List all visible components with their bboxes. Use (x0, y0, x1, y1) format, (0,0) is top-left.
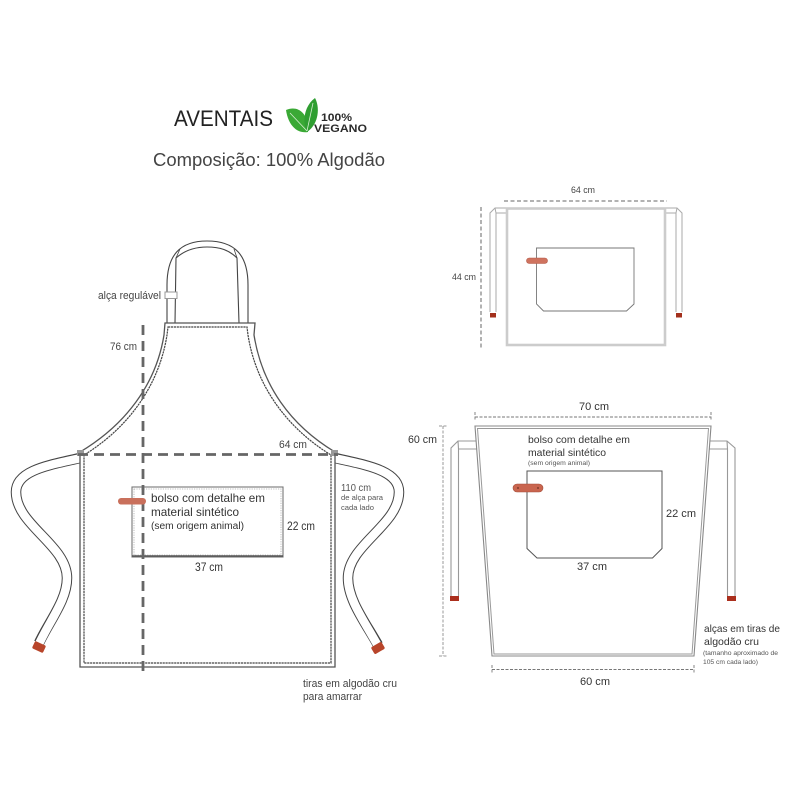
label: 70 cm: 70 cm (579, 401, 609, 413)
apron body (507, 208, 665, 345)
icon: vegan badge: 100% (321, 112, 352, 124)
strap joints (77, 450, 338, 456)
panel: tapered waist apron (439, 412, 736, 674)
left strap tip (450, 596, 459, 601)
dashed measure: bottom width (492, 665, 694, 674)
strap length note: de alça para (341, 493, 384, 502)
strap note: algodão cru (704, 636, 759, 648)
label: 60 cm height: 60 cm (408, 434, 437, 446)
tie strap note (303, 678, 397, 703)
label: adjustable strap: alça regulável (98, 290, 161, 302)
label: pocket width: 37 cm (195, 560, 223, 574)
tie strap note: tiras em algodão cru (303, 678, 397, 690)
neck strap (167, 241, 248, 323)
label: 64 cm: 64 cm (279, 439, 307, 451)
pocket (536, 248, 634, 311)
icon: vegan badge: VEGANO (314, 123, 367, 135)
pocket note (528, 434, 630, 467)
strap note: alças em tiras de (704, 623, 780, 635)
left tie strap (16, 458, 81, 644)
inner hem (478, 428, 708, 654)
dashed measure: top width (475, 412, 711, 421)
pocket note: bolso com detalhe em (528, 434, 630, 446)
right strap tip (371, 642, 385, 654)
right strap tip (676, 313, 682, 318)
right strap (666, 208, 682, 312)
right strap (709, 441, 735, 596)
adjustable buckle (165, 292, 177, 298)
strap length note (341, 483, 384, 512)
label: 64 cm top: 64 cm (571, 185, 595, 196)
dashed measure: width (504, 200, 667, 202)
tie strap note: para amarrar (303, 691, 362, 703)
right strap tip (727, 596, 736, 601)
left strap tip (490, 313, 496, 318)
leather detail (118, 498, 146, 504)
pocket note (151, 491, 265, 532)
label: 44 cm: 44 cm (452, 272, 476, 283)
pocket (132, 487, 283, 557)
strap length note: cada lado (341, 503, 374, 512)
dashed measure: height (439, 426, 448, 656)
pocket note: (sem origem animal) (151, 521, 244, 532)
icon: vegan badge (286, 98, 367, 135)
stitching (84, 327, 331, 663)
label: 60 cm bottom: 60 cm (580, 676, 610, 688)
pocket note: material sintético (151, 505, 239, 519)
right tie strap (334, 458, 399, 646)
dashed measure: height (480, 207, 482, 349)
left strap (490, 208, 506, 312)
strap note: (tamanho aproximado de (703, 650, 778, 657)
left strap (451, 441, 477, 596)
strap length note: 110 cm (341, 483, 371, 494)
subtitle: composition: Composição: 100% Algodão (153, 150, 385, 170)
panel: bib apron (16, 241, 399, 672)
panel: short waist apron (481, 201, 682, 349)
title: AVENTAIS (174, 106, 273, 131)
apron body (80, 323, 335, 667)
apron body (475, 426, 711, 656)
strap note (703, 623, 780, 666)
label: pocket height: 22 cm (287, 519, 315, 533)
label: pocket height: 22 cm (666, 508, 696, 520)
leather detail (526, 258, 548, 264)
pocket note: bolso com detalhe em (151, 491, 265, 505)
dashed measure lines (78, 325, 338, 672)
leather detail (513, 484, 543, 492)
label: 76 cm: 76 cm (110, 341, 137, 353)
pocket (527, 471, 662, 558)
pocket note: material sintético (528, 447, 606, 459)
strap note: 105 cm cada lado) (703, 659, 758, 666)
label: pocket width: 37 cm (577, 561, 607, 573)
pocket note: (sem origem animal) (528, 460, 590, 467)
left strap tip (32, 641, 46, 653)
